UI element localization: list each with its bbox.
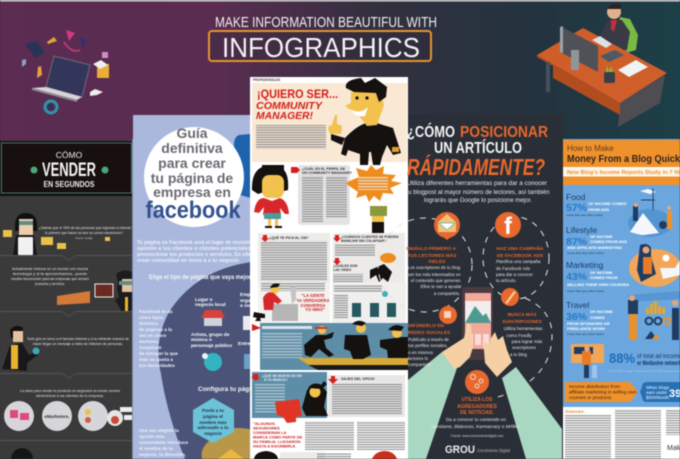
gear shape [202,428,251,459]
header: como vender: VENDER [42,160,96,181]
stat: marketing: 43% [566,271,588,283]
box: cuando manejar colaboradores: MANEJAR SIN COLAPSAR? [341,239,386,243]
dashed ring [378,217,552,397]
text: difundelo: Publícalo a través de [408,337,450,342]
sources: Mak [667,445,680,452]
quote: algunos seguidores: MARCA COMO PARTE DE [253,434,303,440]
sidebar text [139,309,188,457]
text: envialo primero [406,244,462,296]
illustration: analysts and chart [628,291,680,340]
dark blob background [158,262,251,459]
section 4 funnel circles [0,373,132,459]
text: difundelo: REDES SOCIALES [408,330,451,336]
heading: quiero ser: ¡QUIERO SER... [257,89,338,101]
box: gajes del oficio: GAJES DEL OFICIO [341,377,375,381]
callout blue: When blogs [646,385,670,390]
sidebar text: Facebook te da [139,309,173,314]
sources: Sources: [565,409,585,414]
text: busca mas suscripciones: a tu blog. [510,352,528,357]
sidebar text: negocio, la dirección, [139,452,186,457]
heading: guia definitiva: Guía [176,125,208,141]
stat: marketing: Marketing [566,260,604,270]
icon: mail [434,212,460,240]
sidebar text: de escoger la que [139,351,178,356]
stat: food: 57% [566,202,588,214]
text: envialo primero: Ellos te van a ayudar [420,284,462,289]
box: cuando manejar colaboradores: ¿CUÁNDOS CLIENTES SE PUEDEN [341,234,399,239]
text: envialo primero: son los más interesados en [407,272,461,277]
heading: como posicionar [407,123,548,180]
box: cuando manejar colaboradores: LAS VIDEO [333,268,352,272]
quote: algunos seguidores: SEGUIDORES [253,426,280,430]
illustration: woman with laptop [629,244,680,287]
text: envialo primero: FIELES [429,259,446,265]
icon: businessman at desk [537,4,667,127]
heading: quiero ser: MANAGER! [256,111,314,122]
callout blue [640,382,680,402]
box: cuando manejar colaboradores: ¿CUÁLES SON [333,263,358,268]
stat: marketing: OF INCOME [590,270,613,275]
stat: 88 percent: (of 6,000 page views and 10,000 sessions) [609,369,680,373]
sidebar text: de páginas a la [139,327,172,332]
text: utiliza los agregadores: Da a conocer tu contenido en [446,417,506,422]
sidebar text: Asegúrate [139,345,162,350]
option: lugar o negocio local: Lugar o [195,297,213,303]
hexagon: name page [193,398,234,443]
stat: travel: (more than any other niche) [567,332,604,336]
section 4 funnel circles: eMarketers. [44,414,70,419]
panel: profile box [291,165,352,225]
hexagon: name page: nombre más [199,420,227,425]
heading: guia definitiva: empresa en [153,184,231,200]
text: campana facebook ads: Planifica una campaña [496,259,541,264]
icon: pencil [501,288,519,306]
hexagon: name page: adecuado a tu [198,425,229,430]
text: utiliza los agregadores: Menéame, Bitácoras, Karmacracy o Mrfilter. [431,424,521,429]
text columns [254,421,405,459]
stat: food: FROM ADS [588,207,610,212]
text: envialo primero: TUS LECTORES MÁS [408,252,457,259]
heading: quiero ser: COMMUNITY [256,101,323,112]
quote: la gente [297,293,329,312]
text: busca mas suscripciones: SUSCRIPCIONES [502,319,543,325]
panel: community manager [250,77,408,459]
hexagon: name page: Ponle a tu [202,408,224,413]
panel: profile box: ¿CUÁL ES EL PERFIL DE [302,166,346,171]
title box: INFOGRAPHICS [222,32,420,63]
text: campana facebook ads: para dar a conocer [496,272,533,277]
section 3 text and character: Todo gira en torno a el famoso Internet y a su eficiente manera de [27,336,130,341]
header: como vender: EN SEGUNDOS [44,179,95,189]
intro text [406,180,550,204]
text: utiliza los agregadores: UTILIZA LOS [462,397,493,403]
text: difundelo [408,322,451,367]
intro text: crear comunidad en torno a a tu negocio [137,258,239,264]
text: campana facebook ads [496,245,544,283]
text: busca mas suscripciones: como Feedly [506,333,532,338]
callout blue: earn under [646,390,668,395]
intro text: lograrás que Google lo posicione mejor. [424,197,532,204]
text: difundelo: tus perfiles sociales, [408,343,448,348]
quote: la gente: "LA GENTE [301,293,325,298]
subheading: configura tu pagina: Configura tu pági [198,386,251,393]
text: utiliza los agregadores: AGREGADORES [457,404,498,410]
stat: food: (more than any other niche) [566,213,603,217]
sources [563,407,680,459]
stat: 88 percent [609,351,680,373]
label: profesionales: PROFESIONALES [253,78,280,82]
sidebar text: cinco tipos [139,315,164,320]
stat: travel: OF INCOME [590,309,613,314]
section 3 text and character [0,311,132,371]
section 2 text and boxes: Actualmente vivimos en un mundo con mucha [12,266,89,271]
section 4 funnel circles: La clave para vender tu producto en segundos es enviar correos [20,388,120,393]
stat: food: OF INCOME COMES [588,201,627,206]
illustration: man at browser [571,344,604,378]
stat: marketing: (more than any other niche) [567,289,604,293]
section 1 intro: Fuente: Google [75,237,93,240]
callout orange: Income distribution from [569,384,620,390]
sidebar text: tus necesidades [139,363,175,368]
sidebar text: opción más [139,434,165,439]
panel: como posicionar [378,115,563,459]
text: difundelo: DIFÚNDELO EN [408,322,445,329]
stat: travel: FREELANCE WORK [567,326,605,331]
hexagon: name page: página el [203,414,223,419]
peach header block [252,83,407,162]
quote: algunos seguidores: CONSIDERAN LA [253,430,286,435]
quote: la gente: YA VERDADERA [297,298,329,303]
heading: como posicionar: RÁPIDAMENTE? [407,153,545,180]
logo: grou: GROU [445,444,475,456]
callout orange [565,382,638,402]
header orange: How to Make [567,144,614,153]
callout orange: affiliate marketing in selling own [569,390,637,396]
option: empresa: Entret [238,341,252,347]
box: que te pica: ¿QUÉ TE PICA AL CM? [269,235,308,240]
box: cuando manejar colaboradores [333,233,405,283]
arm right [502,367,562,459]
heading: como posicionar: POSICIONAR [460,124,548,141]
intro text: promocionar tus productos o servicios. En ella [137,252,251,258]
icon: hand holding money [370,206,387,233]
heading: como posicionar: ¿CÓMO [407,123,455,141]
text: utiliza los agregadores: DE NOTICIAS: [460,410,494,416]
panel: profile box: UN COMMUNITY MANAGER? [302,171,352,175]
option: lugar o negocio local [195,297,226,326]
hexagon: name page: negocio [204,431,222,436]
quote: la gente: CONVIERSA [301,303,325,308]
option: lugar o negocio local: negocio local [195,302,226,308]
intro text: Utiliza diferentes herramientas para dar a conocer [407,180,547,187]
text: difundelo: lectores lo [408,356,429,361]
logo: grou [445,444,510,456]
quote: algunos seguidores: HASTA A ESCRIBIRLE [253,444,296,448]
sidebar text: distintos [139,321,159,326]
text: utiliza los agregadores: Fuente: www.creciemientodigital.com [451,434,504,438]
section 2 text and boxes: productos y servicios. [35,281,65,286]
box: phones [332,283,406,323]
illustration: camping [628,188,672,237]
section 1 intro [3,213,132,255]
stat: travel: 36% [566,311,588,323]
section 1 intro: ¿Sabías que el 78% de las personas que ingresan a Internet [39,225,132,230]
stat: travel: COMES [590,315,605,320]
text: difundelo: compartirán. [408,362,432,367]
box: gajes del oficio [328,375,405,417]
box: que se mueve: ¿QUÉ SE MUEVE EN CM [262,373,302,378]
quote: algunos seguidores [253,421,303,448]
callout orange: courses or products. [569,395,612,401]
hands [442,323,512,377]
panel: guia facebook [133,115,252,459]
stat: lifestyle: 87% [566,236,588,248]
character: pointing man [328,78,401,165]
section 2 text and boxes: tecnología y si la aprovechamos...puede [13,271,88,276]
option: artista grupo [191,332,232,371]
intro text: opinión a los clientes o clientes potenciales [137,246,251,252]
sidebar text: sectores. [139,339,159,344]
phone [462,287,493,360]
text: difundelo: o en mismos [408,350,434,355]
section 1 intro: lo primero que hacen es leer su correo electrónico? [45,230,124,235]
callout: starburst [345,165,402,202]
stat: lifestyle [566,225,627,255]
option: empresa: orga [240,298,251,304]
text: envialo primero: Los suscriptores de tu blog [408,265,461,270]
band: blue with boat [252,321,408,370]
white title circle [144,127,244,227]
text: busca mas suscripciones [502,311,543,357]
stat: food: Food [566,192,586,202]
subheading: elige tipo de pagina: Elige el tipo de página que vaya mejor [149,274,252,281]
callout blue: $500/Month [646,395,670,400]
stat: marketing [566,260,630,293]
section 2 text and boxes [0,255,132,312]
option: artista grupo: personaje público [191,343,232,349]
icon: facebook: f [504,213,513,240]
box: que se mueve [251,372,328,423]
text: utiliza los agregadores [431,397,521,438]
header orange [563,140,680,185]
stat: marketing: COMES FROM [590,275,618,280]
text: busca mas suscripciones: para lograr más [512,339,543,344]
stat: lifestyle: AND AFFILIATE MARKETING [567,245,622,250]
stat: lifestyle: OF INCOME [590,234,613,239]
header orange: New Blog's Income Reports Study in 7 Ni [567,170,680,176]
text: envialo primero: ENVÍALO PRIMERO A [406,244,456,252]
logo: grou: Crecimiento Digital [477,448,510,453]
character: woman [252,165,289,228]
option: artista grupo: Artista, grupo de [191,332,230,338]
heading: guia definitiva [146,125,241,224]
stat: lifestyle: Lifestyle [566,225,597,235]
sidebar text: vez en cinco [139,333,167,338]
text: busca mas suscripciones: BUSCA MÁS [508,311,537,318]
heading: quiero ser [256,89,338,122]
sidebar text: Una vez elegido la [139,428,179,433]
sidebar text: más se ajusta a [139,357,173,362]
heading: guia definitiva: para crear [158,155,226,171]
text: envialo primero: a compartirlo. [434,291,460,296]
stat: marketing: SELLING THEIR OWN COURSES [567,282,630,287]
title line: MAKE INFORMATION BEAUTIFUL WITH [215,14,437,31]
quote: la gente: YO NINO" [305,307,325,312]
box: que se mueve: A TU MARCA? [264,378,287,382]
icon: facebook [495,212,521,240]
intro paragraph [256,125,326,149]
heading: guia definitiva: tu página de [151,170,233,186]
intro text: tu blogpost al mayor número de lectores, así también [406,189,550,196]
heading: guia definitiva: definitiva [161,140,223,156]
text: envialo primero: el contenido que generas. [411,278,461,283]
box: que te pica [258,233,330,283]
text: campana facebook ads: DE FACEBOOK ADS [497,253,544,259]
text: campana facebook ads: HAZ UNA CAMPAÑA [497,245,544,252]
arm left [408,352,457,459]
sidebar text: conveniente introduce [139,440,188,445]
icon: pins [465,370,489,394]
quote: algunos seguidores: SU FAMILIA. LLEGARON [253,439,300,444]
sidebar text: el nombre de tu [139,446,173,451]
stat: travel: FROM SPONSORS OR [567,321,610,326]
panel: blog income [563,139,680,459]
quote: algunos seguidores: "ALGUNOS [253,421,275,426]
stat: travel: Travel [566,300,589,310]
header: como vender [0,141,132,196]
header: como vender: CÓMO [56,150,83,160]
stat: lifestyle: COMES FROM ADS [590,239,627,244]
text: campana facebook ads: tu artículo. [496,278,516,283]
character: man at desk [253,283,330,323]
option: artista grupo: música o [191,337,212,343]
heading: como posicionar: UN ARTÍCULO [434,140,522,157]
stat: 88 percent: 88% [609,351,635,366]
section 2 text and boxes: resultar favorecedor para las empresas que venden [11,276,89,281]
text: busca mas suscripciones: Utiliza herramientas [504,326,543,331]
stat: lifestyle: (more than any other niche) [567,251,604,255]
option: empresa [238,292,252,369]
section 4 funnel circles: electrónicos a los clientes de tu empresa. [36,393,104,398]
option: empresa: o ins [240,303,252,309]
icon: share [439,306,457,324]
icon: laptop with floating gadgets [22,30,109,113]
panel: como vender en segundos [0,139,135,459]
text: campana facebook ads: de Facebook Ads [496,266,531,271]
stat: food [566,192,627,217]
text: busca mas suscripciones: suscriptores [512,345,537,350]
intro text [137,240,251,264]
section 3 text and character: hacer llegar un mensaje a miles de millones de personas. [33,341,123,346]
heading: guia definitiva: facebook [146,197,241,224]
intro text: Tu página en Facebook será el lugar de reunión [137,240,251,246]
option: empresa: Empr [240,292,252,298]
stat: travel [566,300,613,336]
blue logo tab [234,134,251,198]
